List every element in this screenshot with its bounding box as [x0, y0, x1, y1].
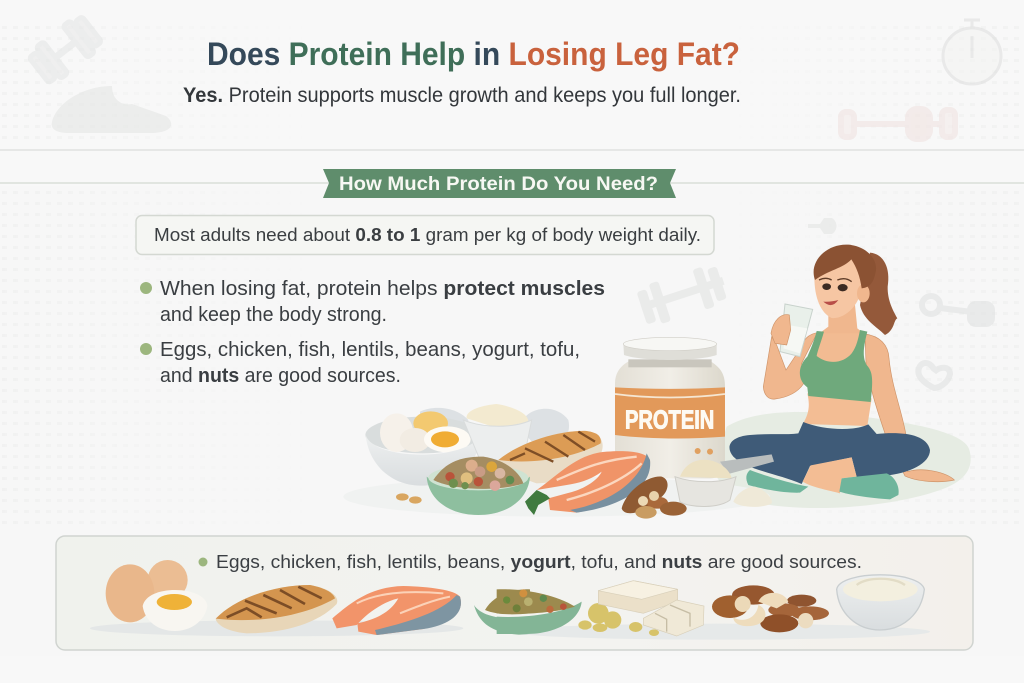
- face: [814, 256, 861, 318]
- strip foods left: [90, 560, 530, 636]
- icon: dumbbell middle: [635, 262, 730, 328]
- ground shadow: [343, 477, 770, 517]
- midriff: [803, 393, 872, 426]
- faint background fitness icons: [27, 13, 1001, 388]
- chest skin: [815, 333, 867, 364]
- ponytail: [860, 253, 897, 335]
- page background: [0, 149, 1024, 184]
- right arm: [865, 334, 954, 482]
- lentil bowl left half: [474, 589, 530, 635]
- salmon strip: [332, 586, 461, 635]
- fingers: [771, 315, 791, 345]
- section heading ribbon: How Much Protein Do You Need?: [339, 173, 658, 195]
- shoe right: [839, 473, 899, 499]
- egg bowl: [365, 411, 481, 486]
- food shadow left: [90, 620, 463, 636]
- icon: sneaker top left: [52, 86, 171, 133]
- food shadow right: [510, 624, 930, 640]
- ear: [857, 284, 870, 302]
- text block: sources bullet: Eggs, chicken, fish, lentils, beans, yogurt, tofu,: [160, 338, 580, 361]
- icon: small shape: [808, 218, 836, 234]
- text block: benefit bullet: and keep the body strong.: [160, 303, 387, 326]
- protein jar: PROTEIN: [625, 404, 714, 434]
- crossed calf skin: [803, 457, 857, 493]
- soybeans: [578, 603, 659, 636]
- yogurt cup: [463, 404, 532, 462]
- section heading ribbon: [323, 169, 676, 198]
- back blobs: [420, 408, 569, 447]
- whole eggs: [106, 560, 188, 622]
- title: Does Protein Help in Losing Leg Fat?: [207, 36, 740, 72]
- illustration: woman on mat: [713, 245, 971, 508]
- scoop with powder: [675, 454, 774, 506]
- icon: resistance band: [922, 296, 992, 324]
- powder pile: [733, 487, 772, 507]
- mixed nuts: [712, 585, 829, 632]
- mouth: [823, 300, 838, 305]
- neck: [815, 305, 868, 337]
- tofu: [598, 581, 704, 636]
- callout: daily protein amount: [136, 216, 714, 254]
- brows: [819, 278, 852, 282]
- text block: benefit bullet: [140, 277, 605, 326]
- icon: heart: [918, 363, 950, 388]
- salmon steak: [537, 451, 650, 513]
- icon: stopwatch top right: [943, 20, 1001, 84]
- illustration: food with protein jar: [343, 337, 774, 519]
- mat: [713, 412, 971, 508]
- shoe left: [746, 470, 808, 493]
- sports top: [800, 330, 872, 402]
- left arm: [763, 333, 817, 399]
- text block: benefit bullet: When losing fat, protein helps protect muscles: [160, 277, 605, 300]
- peanuts: [396, 493, 422, 504]
- leggings: [729, 422, 930, 484]
- halved egg: [143, 590, 207, 631]
- text block: sources bullet: [140, 338, 580, 387]
- lentil bowl right half: [497, 589, 582, 634]
- icon: pink dumbbell: [841, 109, 955, 139]
- grilled chicken: [498, 431, 603, 483]
- strip caption: Eggs, chicken, fish, lentils, beans, yogurt, tofu, and nuts are good sources.: [216, 551, 862, 572]
- yogurt bowl: [837, 575, 924, 630]
- strip foods right: [497, 575, 930, 640]
- green lentil bowl: [427, 457, 530, 515]
- parsley: [525, 490, 550, 515]
- text block: sources bullet: and nuts are good sources.: [160, 364, 401, 387]
- icon: dumbbell top left: [27, 13, 104, 86]
- subtitle: Yes. Protein supports muscle growth and keeps you full longer.: [183, 84, 741, 107]
- eyes: [822, 283, 848, 291]
- nuts: [622, 477, 687, 519]
- grilled chicken strip: [216, 585, 337, 633]
- hair top: [814, 245, 876, 288]
- callout: daily protein amount: Most adults need about 0.8 to 1 gram per kg of body weight daily.: [154, 224, 701, 245]
- protein jar: [615, 337, 725, 478]
- glass: [780, 304, 813, 357]
- panel: protein foods strip: [56, 536, 973, 650]
